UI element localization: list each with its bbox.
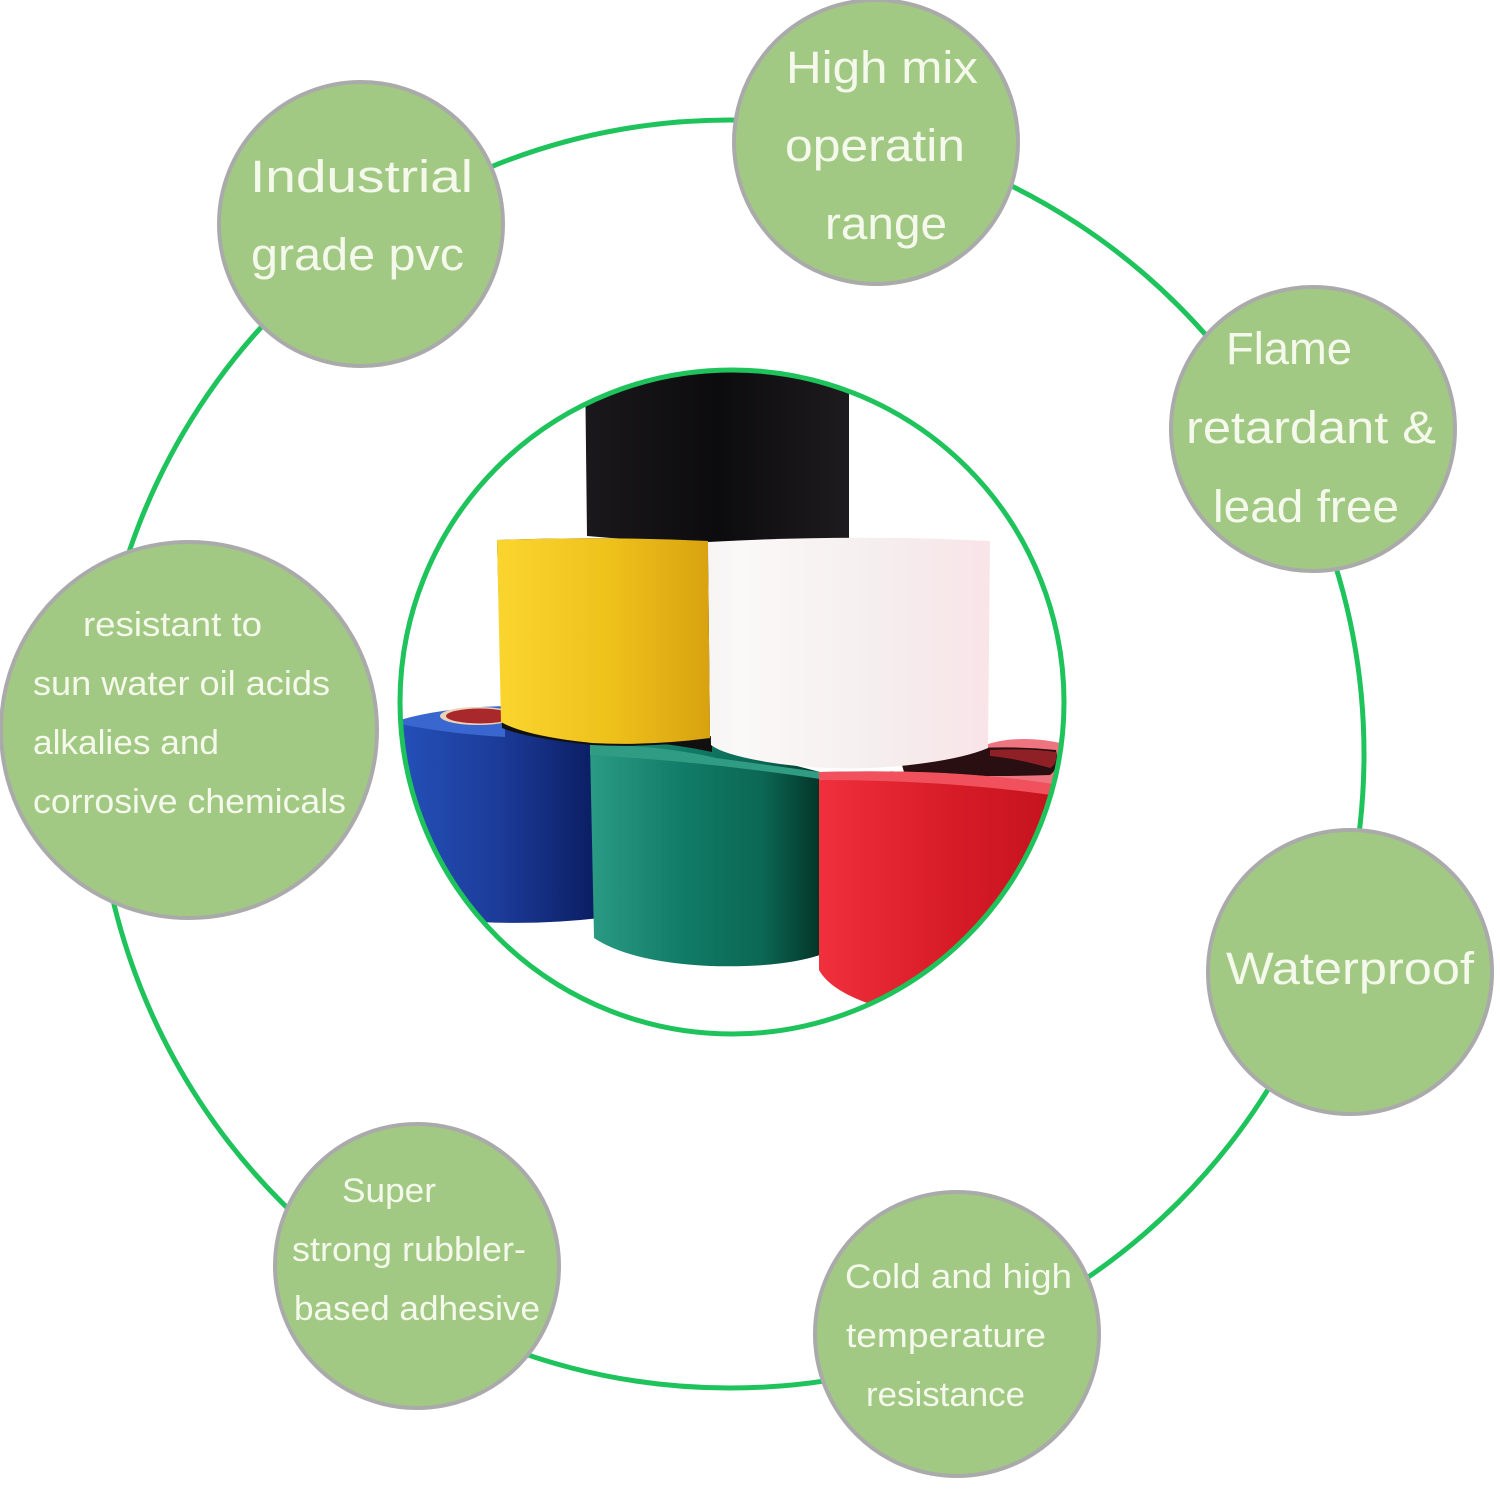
central photo: stacked coloured tape rolls — [400, 360, 1070, 1040]
inner ring — [400, 370, 1064, 1034]
badge: cold and high temperature resistance — [815, 1192, 1099, 1476]
badge: chemical resistance: resistant to — [83, 606, 262, 644]
badge: industrial grade pvc — [219, 82, 503, 366]
badge: high mix operating range: operatin — [785, 120, 965, 171]
badge: super strong rubber-based adhesive — [275, 1124, 559, 1408]
tape roll: white — [708, 538, 990, 769]
outer connecting ring — [96, 120, 1364, 1388]
badge: high mix operating range: range — [825, 198, 947, 249]
tape roll: green — [590, 736, 820, 966]
badge: super strong rubber-based adhesive: based adhesive — [294, 1290, 540, 1328]
badge: cold and high temperature resistance: Cold and high — [845, 1258, 1072, 1296]
badge: chemical resistance — [1, 542, 377, 918]
badge: flame retardant and lead free: retardant & — [1186, 402, 1436, 453]
badge: flame retardant and lead free: lead free — [1213, 481, 1399, 532]
badge: cold and high temperature resistance: resistance — [866, 1376, 1025, 1414]
badge: super strong rubber-based adhesive: strong rubbler- — [292, 1231, 526, 1269]
badge: waterproof — [1208, 830, 1492, 1114]
badge: waterproof: Waterproof — [1226, 943, 1475, 994]
badge: industrial grade pvc: Industrial — [250, 151, 473, 202]
badge: chemical resistance: alkalies and — [33, 724, 219, 762]
badge: chemical resistance: corrosive chemicals — [33, 783, 346, 821]
tape roll: blue — [400, 706, 600, 923]
badge: cold and high temperature resistance: temperature — [846, 1317, 1046, 1355]
badge: chemical resistance: sun water oil acids — [33, 665, 330, 703]
badge: flame retardant and lead free — [1171, 287, 1455, 571]
badge: flame retardant and lead free: Flame — [1226, 323, 1352, 374]
badge: super strong rubber-based adhesive: Super — [342, 1172, 436, 1210]
badge: industrial grade pvc: grade pvc — [251, 229, 464, 280]
badge: high mix operating range — [734, 0, 1018, 284]
tape roll: black — [585, 360, 849, 543]
badge: high mix operating range: High mix — [786, 42, 979, 93]
tape roll: yellow — [497, 538, 710, 746]
tape roll: red — [819, 739, 1059, 1003]
